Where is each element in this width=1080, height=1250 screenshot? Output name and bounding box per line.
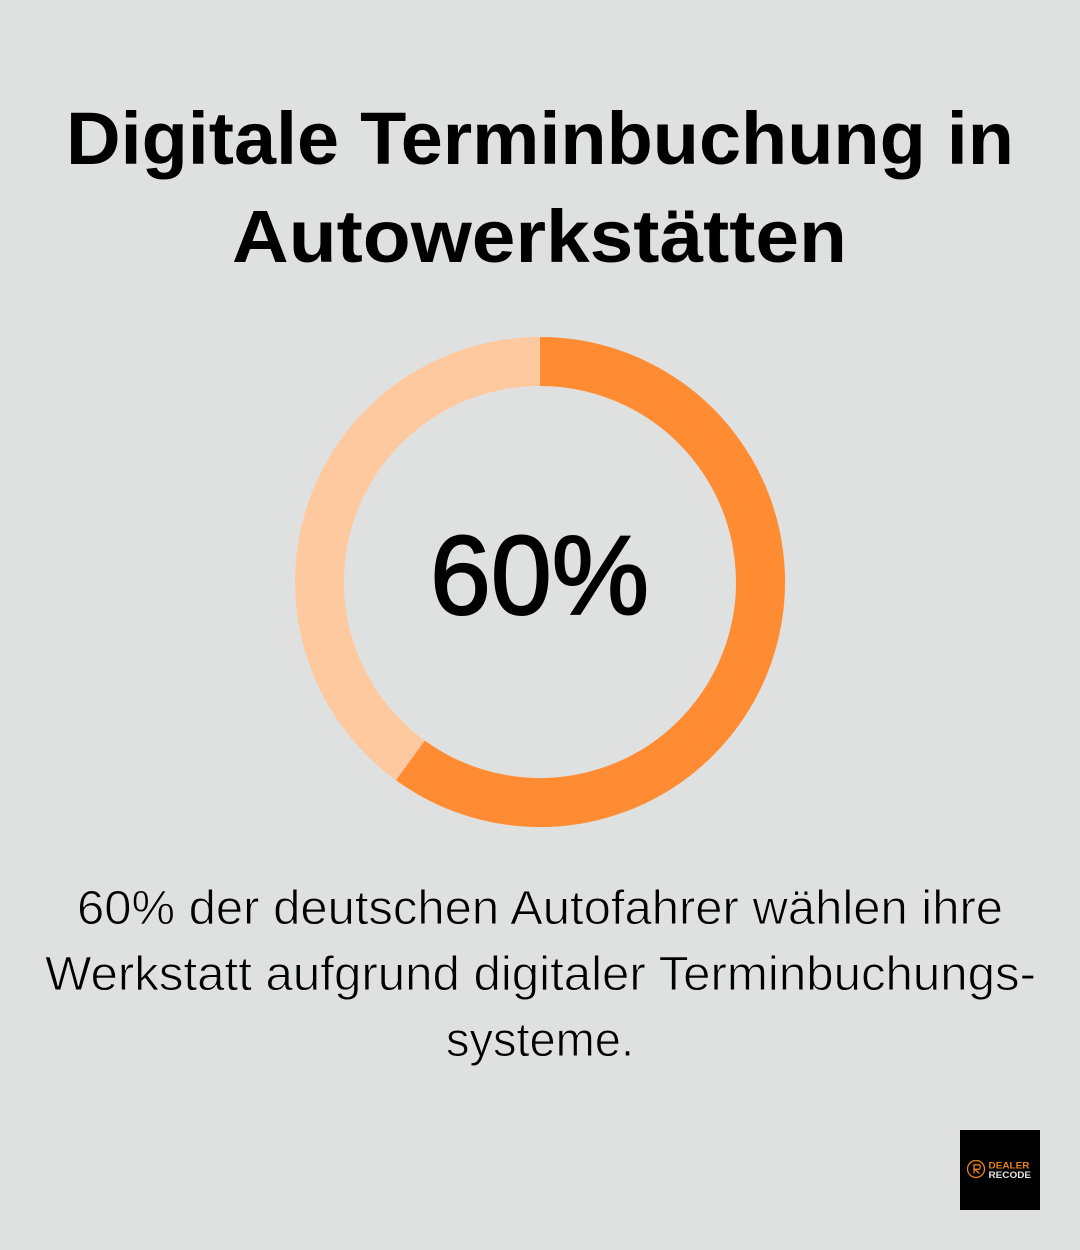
logo background xyxy=(960,1130,1040,1210)
logo: Dealer Recode: RECODE xyxy=(988,1170,1031,1180)
title: Autowerkstätten xyxy=(232,195,847,278)
title: Digitale Terminbuchung in xyxy=(66,97,1014,180)
description text xyxy=(45,882,1036,1067)
donut centre value: 60% xyxy=(430,513,649,638)
logo: Dealer Recode xyxy=(960,1130,1040,1210)
logo wordmark: DEALER xyxy=(988,1160,1030,1170)
logo icon xyxy=(968,1160,984,1178)
description text: Werkstatt aufgrund digitaler Terminbuchungs- xyxy=(45,948,1036,1001)
title xyxy=(66,97,1014,278)
donut chart: 60% xyxy=(320,362,760,802)
donut 60% segment xyxy=(410,362,760,802)
description text: 60% der deutschen Autofahrer wählen ihre xyxy=(77,882,1003,935)
donut remainder segment xyxy=(320,362,760,802)
description text: systeme. xyxy=(446,1014,634,1067)
